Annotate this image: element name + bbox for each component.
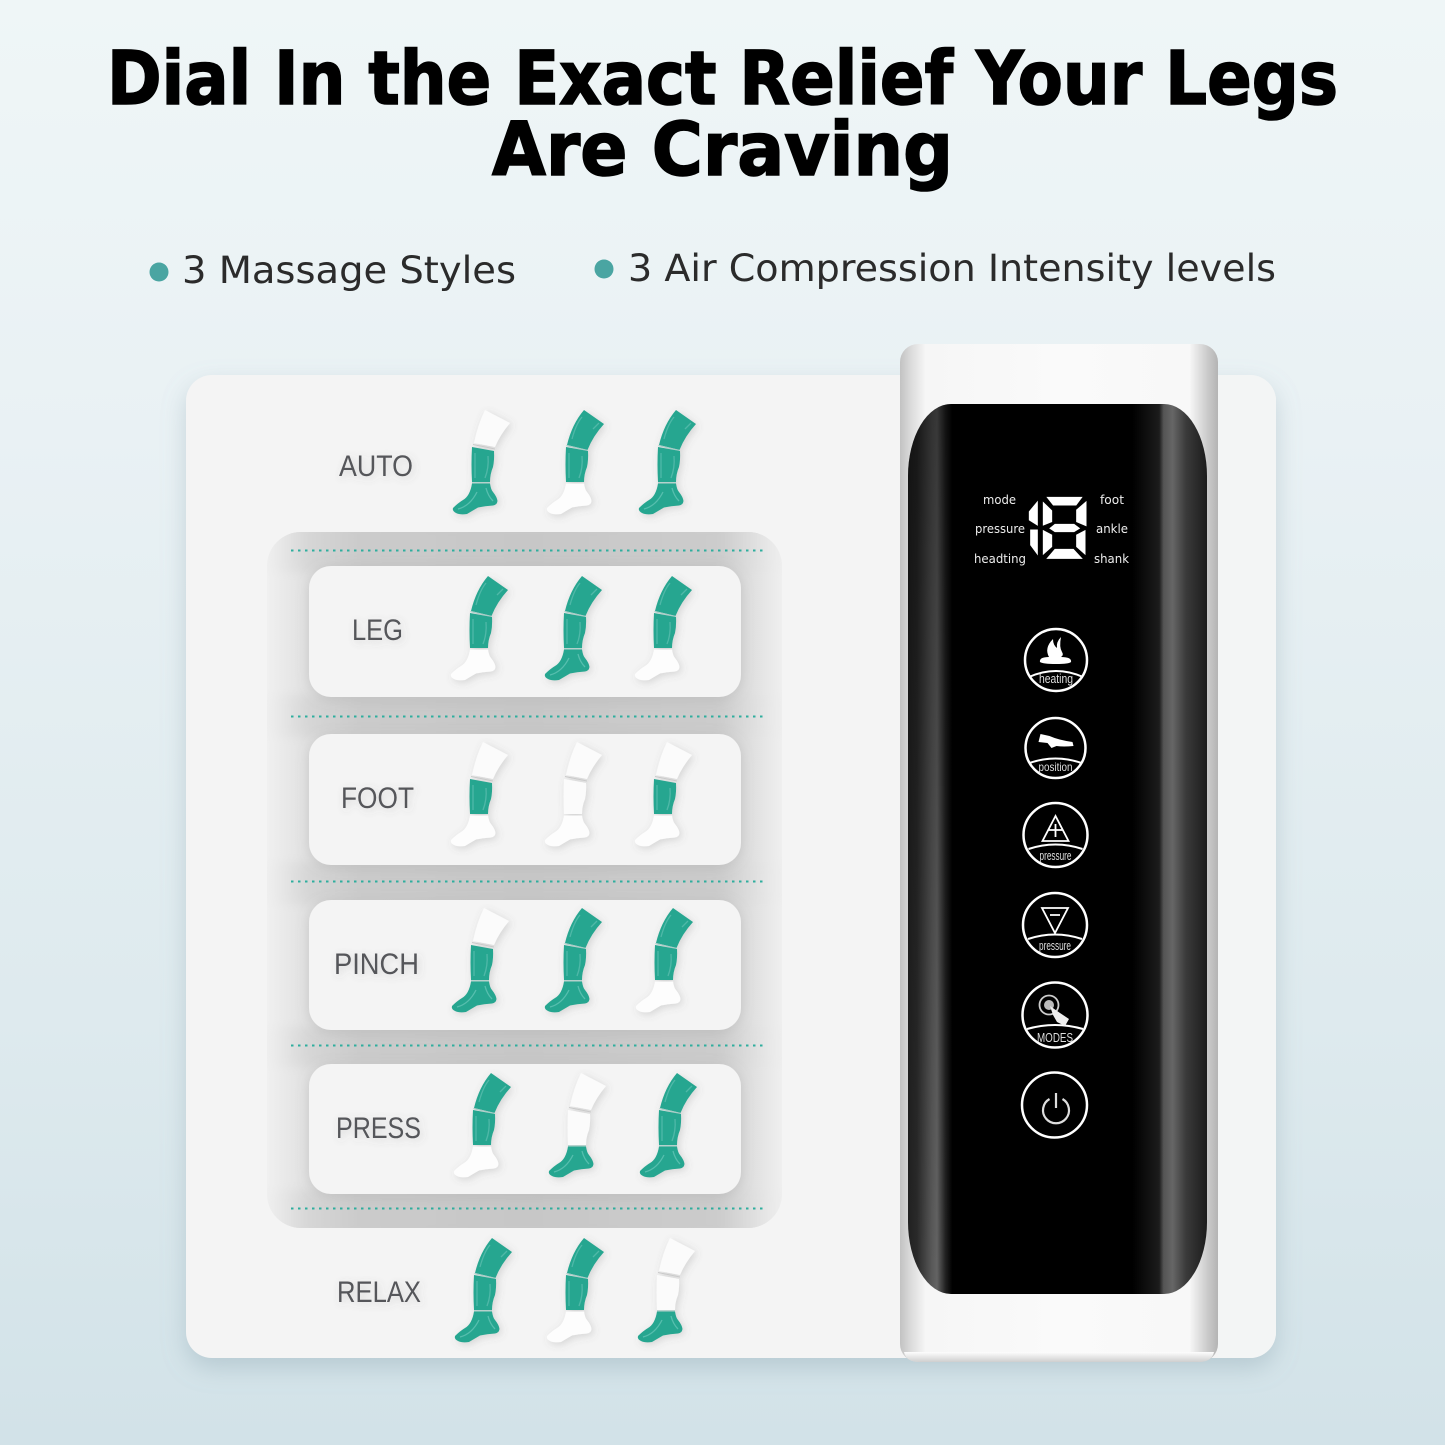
button: pressure up xyxy=(1024,803,1088,867)
button: pressure down: pressure xyxy=(1039,938,1071,953)
status labels: headting xyxy=(974,552,1026,566)
status labels: pressure xyxy=(975,522,1025,536)
row: LEG: LEG xyxy=(352,614,403,647)
button: position xyxy=(1026,718,1086,778)
feature: 3 massage styles: 3 Massage Styles xyxy=(182,249,516,292)
row: AUTO xyxy=(339,410,696,514)
button: pressure up: pressure xyxy=(1040,848,1072,863)
controller device xyxy=(900,344,1218,1362)
status labels xyxy=(974,493,1129,566)
button: position: position xyxy=(1038,760,1072,774)
row: PINCH: PINCH xyxy=(334,948,419,981)
button: heating: heating xyxy=(1039,671,1073,686)
mode cards xyxy=(309,566,741,1194)
button: pressure down xyxy=(1023,893,1087,957)
feature: 3 air compression intensity levels: 3 Air Compression Intensity levels xyxy=(628,247,1276,290)
screen xyxy=(908,404,1207,1294)
title xyxy=(107,36,1338,193)
status labels: foot xyxy=(1100,493,1124,507)
row: LEG xyxy=(352,576,692,680)
button: modes xyxy=(1022,982,1088,1048)
status labels: mode xyxy=(983,493,1016,507)
status labels: shank xyxy=(1094,552,1129,566)
row: PINCH xyxy=(334,908,693,1012)
row: AUTO: AUTO xyxy=(339,450,413,483)
status labels: ankle xyxy=(1096,522,1128,536)
row: RELAX: RELAX xyxy=(337,1276,421,1309)
dotted dividers xyxy=(291,550,765,1208)
row: FOOT xyxy=(341,742,692,846)
row: PRESS: PRESS xyxy=(336,1112,421,1145)
recessed tray xyxy=(267,522,782,1238)
row: FOOT: FOOT xyxy=(341,782,414,815)
seven-segment display xyxy=(1029,497,1086,558)
button: power xyxy=(1022,1072,1087,1138)
row: RELAX xyxy=(337,1238,695,1342)
panel: massage modes xyxy=(186,375,1276,1358)
button: heating xyxy=(1025,629,1087,691)
button: modes: MODES xyxy=(1037,1030,1073,1045)
title: Are Craving xyxy=(492,107,953,193)
row: PRESS xyxy=(336,1073,697,1177)
